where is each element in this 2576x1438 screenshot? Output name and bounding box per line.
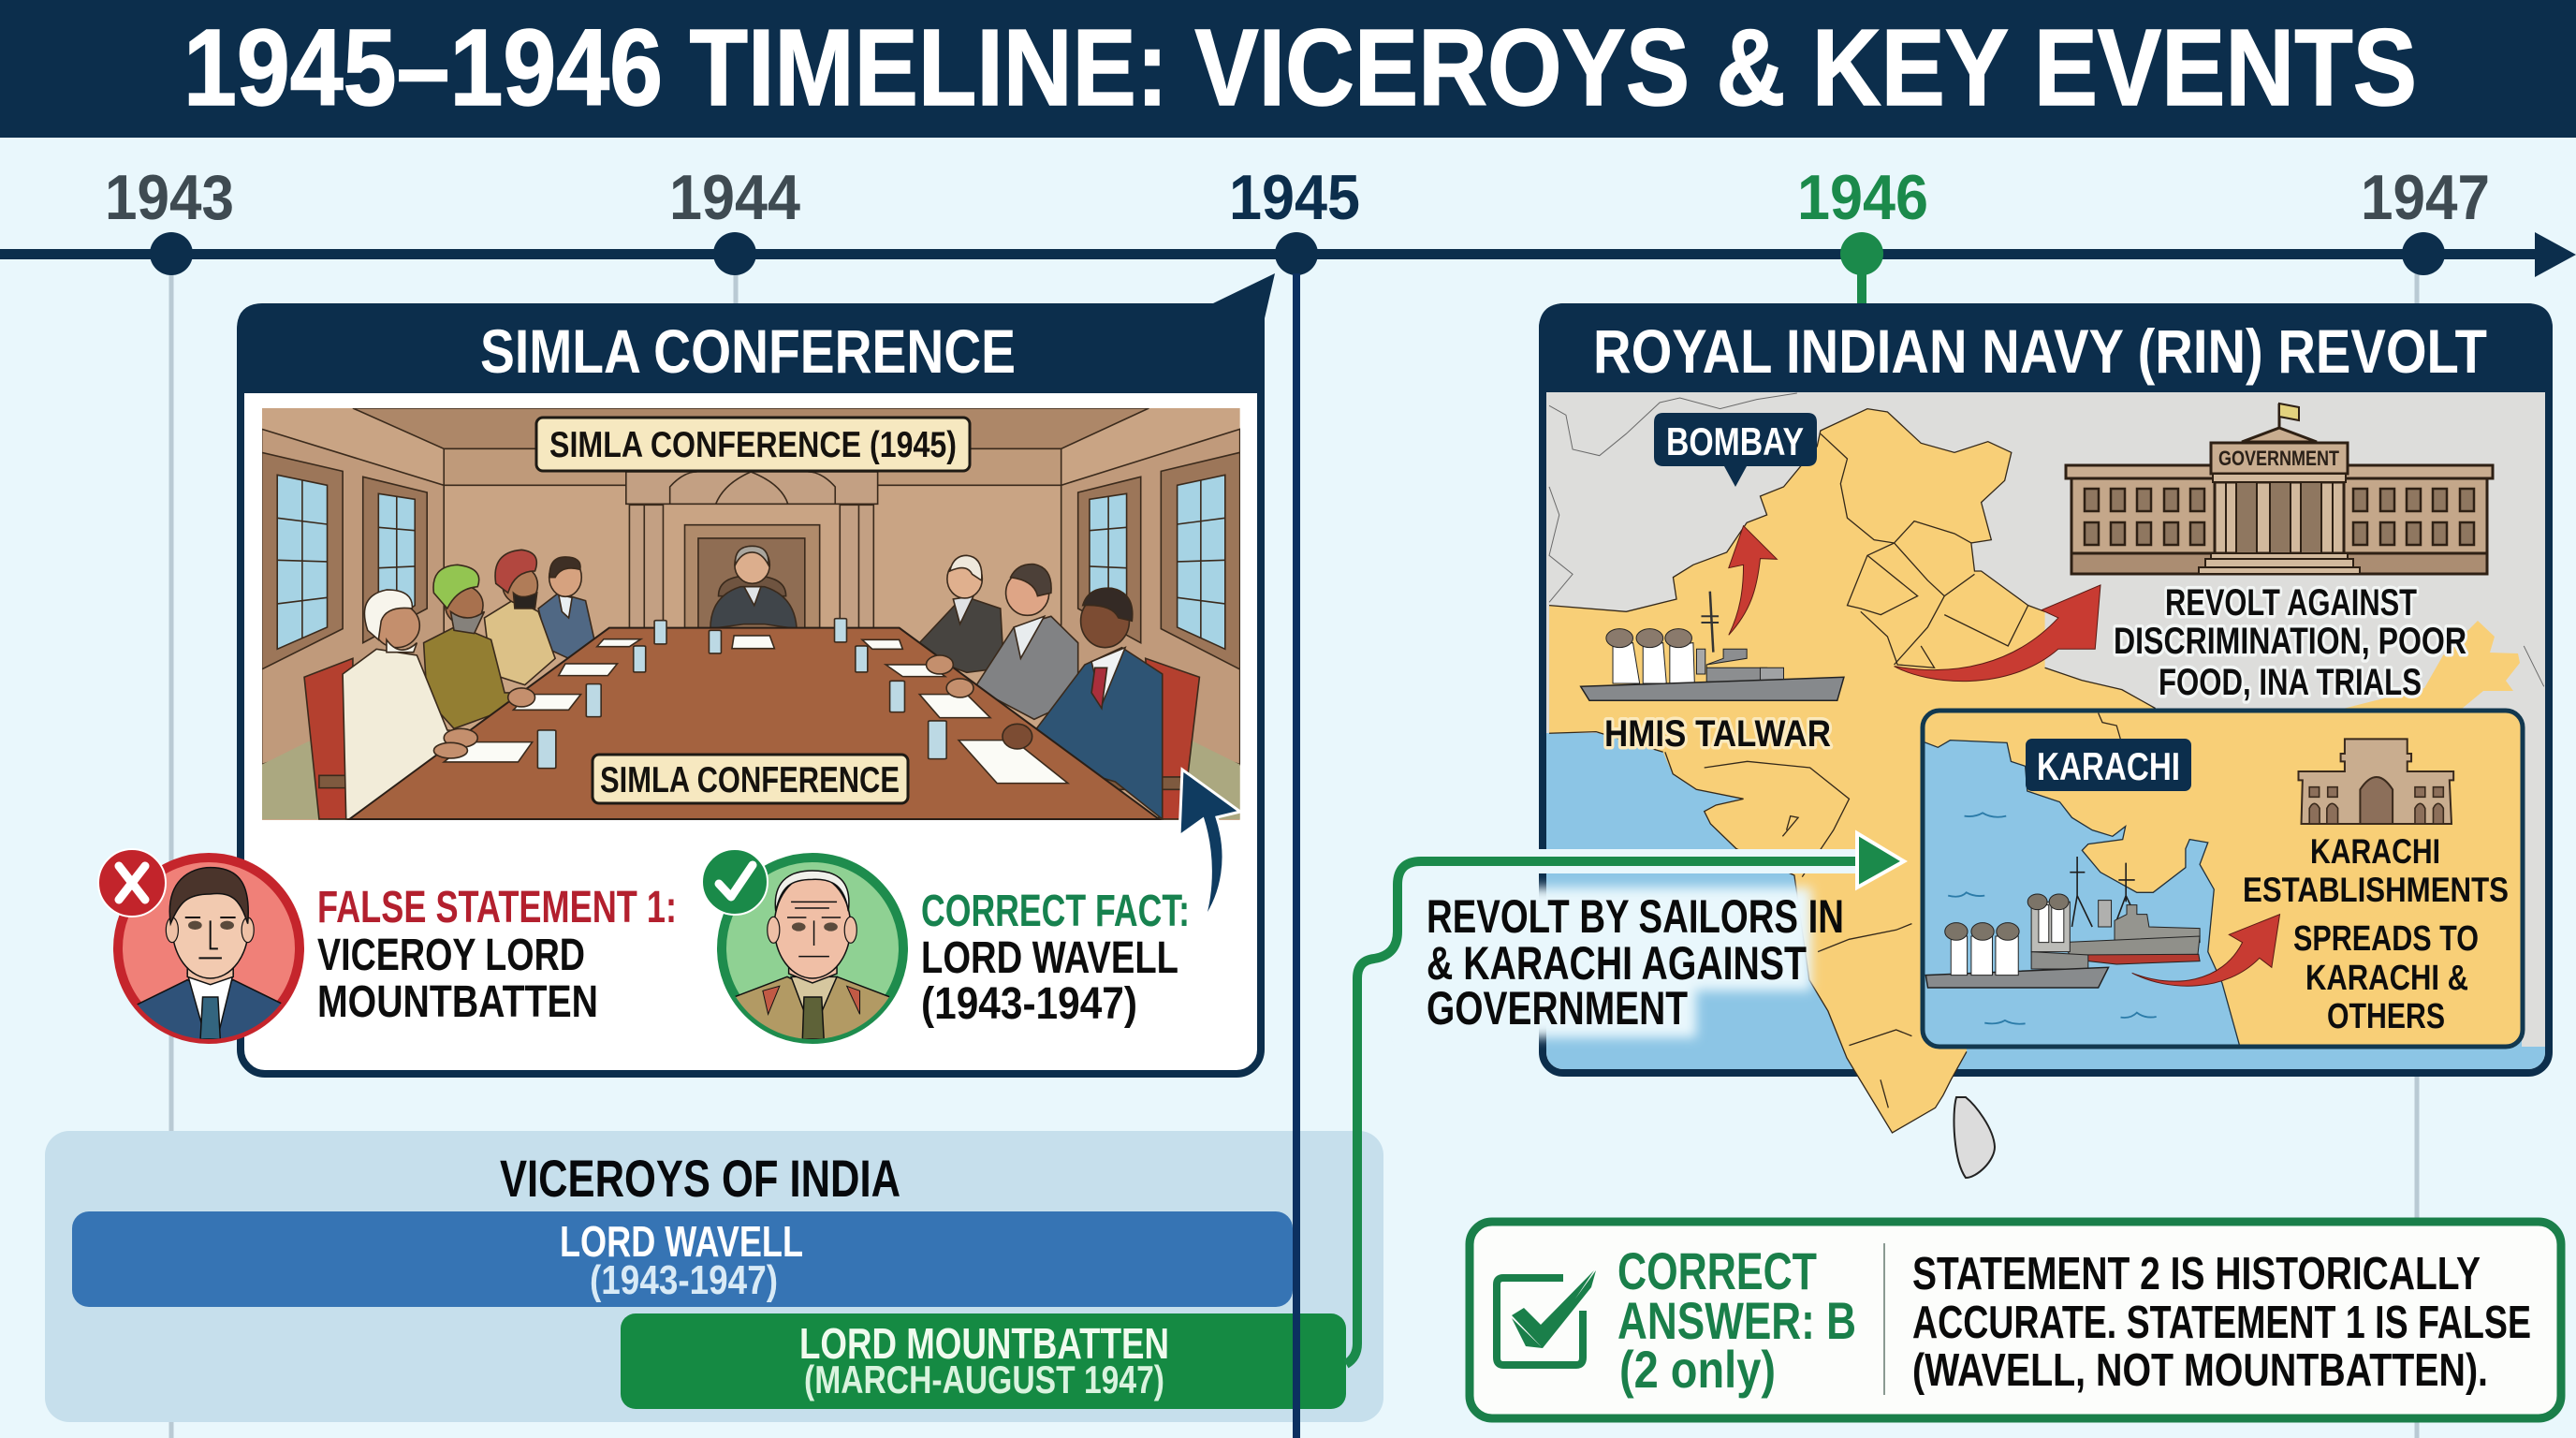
room sign top: SIMLA CONFERENCE (1945)	[549, 425, 957, 465]
year marker 1947: 1947	[2361, 162, 2490, 233]
arrow: navy curved up	[1179, 770, 1240, 920]
ship: HMIS Talwar	[1581, 592, 1844, 700]
right windows	[1161, 452, 1240, 669]
person: second on left	[423, 627, 509, 728]
text: spreads to: OTHERS	[2327, 997, 2445, 1036]
callout: Bombay: BOMBAY	[1666, 419, 1804, 463]
text: revolt causes: DISCRIMINATION, POOR	[2114, 621, 2466, 662]
answer text: CORRECT	[1617, 1241, 1817, 1300]
text: spreads to: SPREADS TO	[2293, 919, 2479, 959]
timeline drop lines	[171, 271, 2417, 1438]
ship rear	[2070, 857, 2135, 927]
text: revolt by sailors: & KARACHI AGAINST	[1427, 937, 1807, 990]
text: false statement: MOUNTBATTEN	[317, 977, 598, 1027]
room sign top	[536, 418, 970, 471]
text: revolt by sailors: GOVERNMENT	[1427, 982, 1688, 1034]
bar: Lord Wavell	[72, 1211, 1293, 1307]
year marker 1943: 1943	[105, 162, 234, 233]
arrow: to Bombay	[1729, 526, 1777, 635]
spreading arrow	[2132, 915, 2280, 986]
hands	[433, 655, 1032, 758]
text: false statement: VICEROY LORD	[317, 931, 585, 980]
text: correct fact: LORD WAVELL	[921, 933, 1178, 983]
text: Karachi establishments: ESTABLISHMENTS	[2243, 871, 2509, 909]
inset: Karachi map	[1922, 711, 2523, 1049]
text: revolt by sailors	[1427, 890, 1844, 1034]
panel frame	[1543, 307, 2549, 1073]
person: fourth on left	[538, 593, 594, 658]
icon: green check badge	[702, 849, 768, 915]
map of India	[1549, 409, 2520, 1133]
year marker 1944: 1944	[669, 162, 800, 233]
chairs	[304, 658, 353, 819]
card header with pointer	[237, 273, 1275, 393]
text: false statement	[317, 883, 677, 1027]
text: revolt by sailors: REVOLT BY SAILORS IN	[1427, 890, 1844, 943]
explanation text	[1912, 1249, 2531, 1396]
north east patch	[2343, 621, 2520, 709]
answer text	[1617, 1241, 1856, 1399]
callout: Bombay	[1654, 413, 1817, 487]
table	[349, 628, 1159, 819]
callout: Karachi: KARACHI	[2037, 744, 2180, 788]
person: first on right	[919, 598, 1003, 674]
year marker 1946	[1797, 162, 1928, 305]
person: third on left	[484, 599, 555, 685]
text: correct fact: CORRECT FACT:	[921, 887, 1190, 936]
panel: Royal Indian Navy revolt	[1539, 303, 2553, 1178]
year marker 1944	[669, 162, 800, 275]
timeline axis	[0, 232, 2576, 277]
Sri Lanka	[1954, 1097, 1995, 1178]
panel: Simla Conference	[98, 273, 1275, 1074]
bar: Lord Wavell: (1943-1947)	[590, 1257, 778, 1303]
bar: Lord Mountbatten: LORD MOUNTBATTEN	[799, 1319, 1169, 1368]
icon: red cross badge	[98, 849, 166, 917]
sailors	[1951, 905, 2064, 976]
bar: Lord Mountbatten	[621, 1313, 1346, 1409]
icon: government building	[2066, 404, 2493, 574]
text: Karachi establishments: KARACHI	[2310, 832, 2440, 871]
water glasses	[537, 619, 946, 769]
year marker 1945	[1229, 162, 1360, 275]
waves	[1948, 813, 2157, 1024]
year marker 1946: 1946	[1797, 162, 1928, 233]
text: revolt causes	[2114, 582, 2466, 703]
card frame	[241, 307, 1261, 1074]
portrait: Wavell	[722, 858, 903, 1051]
answer text: ANSWER: B	[1617, 1291, 1856, 1350]
panel: correct answer	[1470, 1222, 2561, 1418]
callout: Karachi	[2026, 739, 2191, 791]
arrow: to government	[1895, 585, 2100, 682]
panel header	[1539, 303, 2553, 392]
person: third on right	[1034, 648, 1163, 819]
text: Karachi establishments	[2243, 832, 2509, 909]
year marker 1943	[105, 162, 234, 275]
person: second on right	[973, 616, 1078, 719]
viceroys heading: VICEROYS OF INDIA	[500, 1149, 900, 1208]
label: HMIS Talwar: HMIS TALWAR	[1604, 713, 1831, 755]
text: false statement: FALSE STATEMENT 1:	[317, 883, 677, 932]
Karachi establishments building	[2298, 739, 2453, 824]
text: correct fact	[921, 887, 1190, 1029]
room sign bottom	[593, 755, 908, 803]
year marker 1945: 1945	[1229, 162, 1360, 233]
arch and pillars	[626, 472, 878, 504]
illustration: conference room	[262, 408, 1240, 820]
left windows	[262, 452, 343, 669]
vertical 1945 line	[1293, 273, 1300, 1438]
person: first on left	[342, 648, 451, 820]
axis arrow head	[2535, 232, 2576, 277]
text: revolt causes: REVOLT AGAINST	[2165, 582, 2417, 624]
answer text: (2 only)	[1619, 1340, 1776, 1399]
person: chairman	[710, 587, 797, 629]
portrait: Mountbatten	[118, 858, 300, 1051]
text: spreads to	[2293, 919, 2479, 1036]
icon: government building: GOVERNMENT	[2218, 447, 2339, 470]
bar: Lord Mountbatten: (MARCH-AUGUST 1947)	[804, 1357, 1164, 1401]
ship front	[2031, 952, 2088, 969]
year marker 1947	[2361, 162, 2490, 275]
connector: green arrow	[1346, 833, 1904, 1364]
papers	[444, 636, 1068, 784]
text: correct fact: (1943-1947)	[921, 979, 1137, 1029]
text: revolt causes: FOOD, INA TRIALS	[2159, 662, 2422, 703]
map base	[1543, 393, 2550, 1073]
pale halos behind connector and revolt text	[1404, 849, 1872, 1037]
room sign bottom: SIMLA CONFERENCE	[600, 760, 900, 800]
card heading: SIMLA CONFERENCE	[480, 316, 1016, 386]
panel: Viceroys of India	[45, 1131, 1383, 1422]
icon: check box	[1497, 1270, 1596, 1365]
bar: Lord Wavell: LORD WAVELL	[560, 1217, 803, 1266]
text: spreads to: KARACHI &	[2305, 959, 2468, 998]
